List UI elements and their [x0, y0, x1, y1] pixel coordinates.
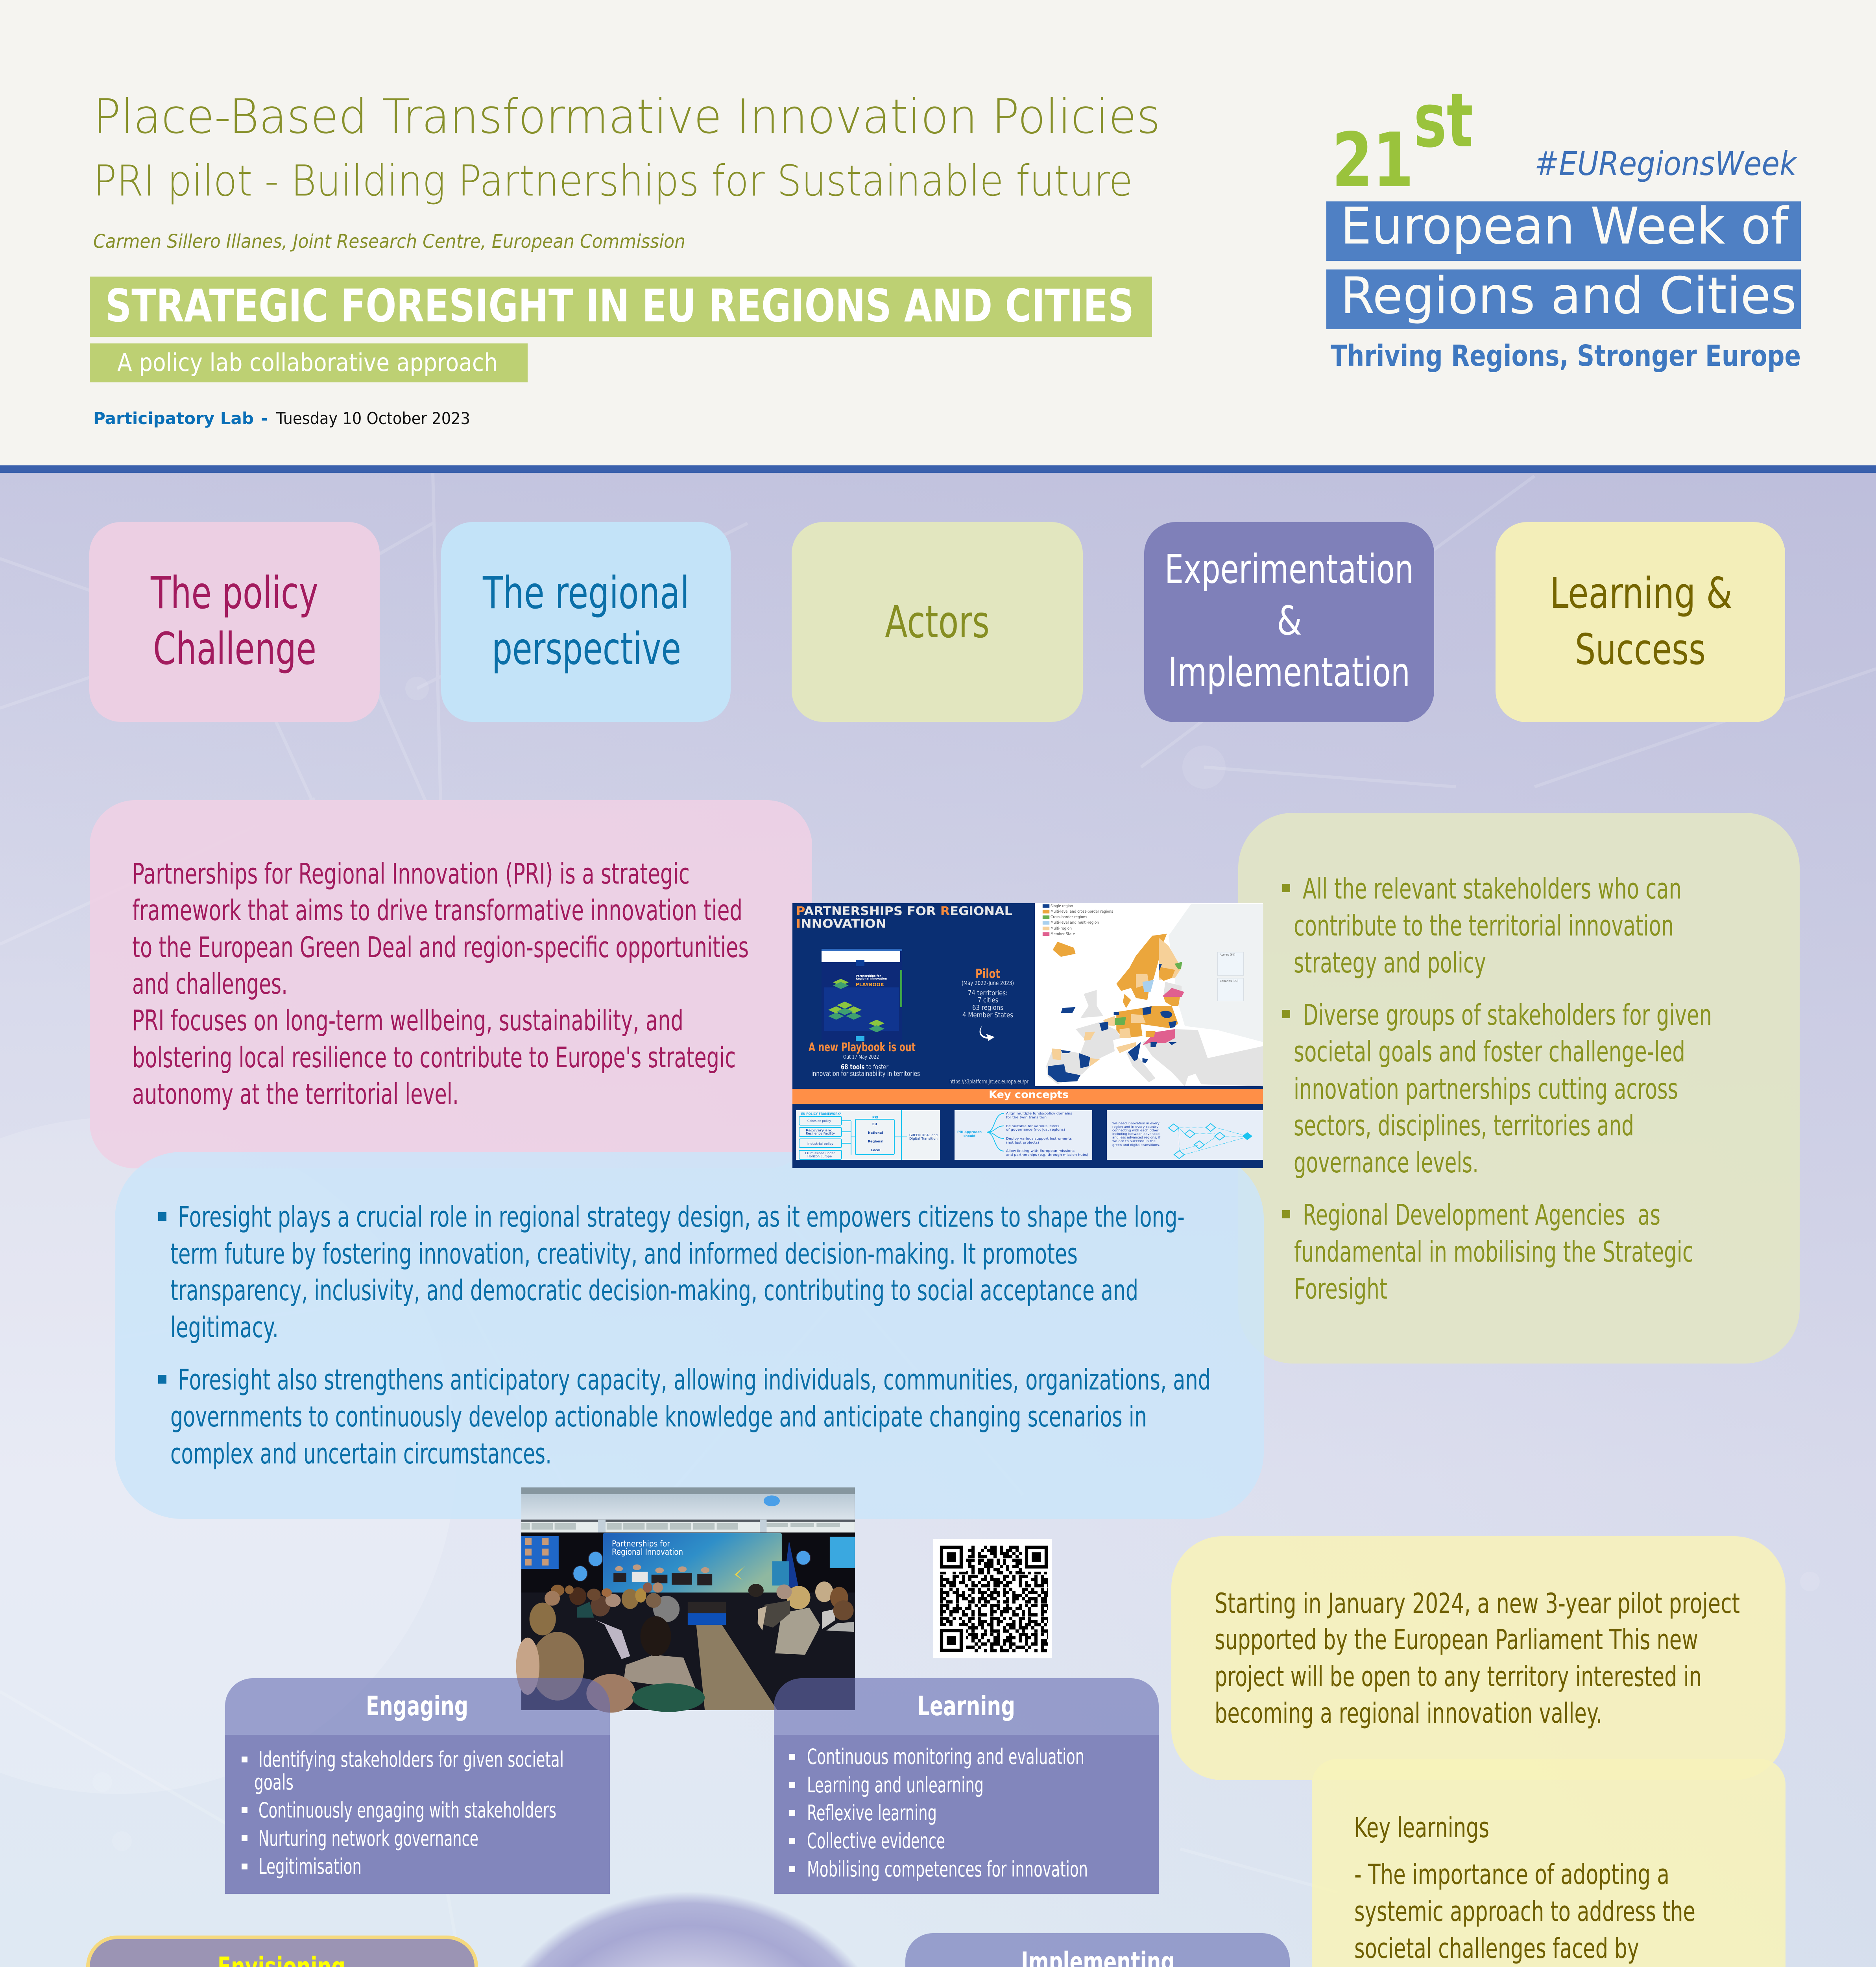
key concept: EU policy framework: EU POLICY FRAMEWORK* [801, 1112, 842, 1116]
logo: European Week of Regions and Cities: #EURegionsWeek [1534, 144, 1798, 183]
card: Learning and Success: Success [1575, 625, 1706, 674]
session subtitle: A policy lab collaborative approach [117, 348, 498, 377]
panel: key learnings: - The importance of adopting a [1354, 1858, 1669, 1891]
card: The regional perspective: The regional [482, 568, 689, 619]
map of Europe: Single region [1051, 904, 1073, 908]
key concept: EU policy framework: Local [871, 1148, 881, 1152]
process card: Learning: Learning and unlearning [807, 1773, 984, 1797]
panel: policy challenge: autonomy at the territorial level. [132, 1078, 459, 1111]
panel: regional perspective: governments to continuously develop actionable knowledge and anticipate changing scenarios in [170, 1400, 1147, 1433]
process card: Engaging: Nurturing network governance [259, 1826, 478, 1851]
map of Europe: Cross-border regions [1051, 915, 1087, 919]
panel: actors [1238, 813, 1800, 1364]
card: The policy Challenge [89, 522, 380, 722]
panel: policy challenge: and challenges. [132, 967, 288, 1000]
panel: key learnings: societal challenges faced by [1354, 1932, 1639, 1965]
process card: Engaging: Legitimisation [259, 1854, 362, 1879]
process card: Learning: Continuous monitoring and evaluation [807, 1744, 1084, 1769]
panel: actors: Regional Development Agencies as [1303, 1198, 1660, 1231]
key concept: PRI approach: Allow linking with European missions [1006, 1149, 1075, 1153]
process card: Learning: Collective evidence [807, 1829, 945, 1853]
panel: regional perspective: complex and uncertain circumstances. [170, 1437, 552, 1470]
session subtitle [90, 343, 528, 382]
slide title: PARTNERSHIPS FOR REGIONAL [796, 904, 1012, 918]
card: The policy Challenge: Challenge [153, 624, 316, 675]
panel: new pilot project: project will be open to any territory interested in [1215, 1661, 1702, 1693]
session date [93, 409, 470, 428]
process card: Envisioning (highlighted) [87, 1939, 477, 1967]
panel: new pilot project: supported by the European Parliament This new [1215, 1624, 1698, 1656]
panel: actors: sectors, disciplines, territories and [1294, 1109, 1634, 1142]
session date: Tuesday 10 October 2023 [276, 409, 470, 428]
playbook caption: Out 17 May 2022 [843, 1054, 879, 1060]
panel: regional perspective: term future by fostering innovation, creativity, and informed decision-making. It promotes [170, 1237, 1078, 1270]
panel: actors: All the relevant stakeholders who can [1303, 872, 1682, 905]
playbook caption [809, 1041, 920, 1078]
author line: Carmen Sillero Illanes, Joint Research Centre, European Commission [93, 231, 685, 253]
key concept: EU policy framework [796, 1110, 940, 1160]
card: Experimentation and Implementation: & [1277, 598, 1302, 644]
logo: European Week of Regions and Cities: 21 [1332, 117, 1414, 204]
process card: Learning: Learning [917, 1691, 1015, 1722]
card: The policy Challenge: The policy [150, 568, 318, 619]
key concept: PRI approach: Be suitable for various levels [1006, 1124, 1059, 1128]
panel: actors: societal goals and foster challenge-led [1294, 1035, 1685, 1068]
card: The regional perspective: perspective [492, 624, 681, 675]
process card: Learning [774, 1678, 1159, 1894]
panel: key learnings: Key learnings [1354, 1812, 1489, 1844]
session banner: STRATEGIC FORESIGHT IN EU REGIONS AND CITIES [105, 280, 1134, 332]
map of Europe: Member State [1051, 932, 1075, 936]
playbook caption: A new Playbook is out [809, 1041, 916, 1054]
panel: regional perspective [115, 1152, 1264, 1519]
card: Learning and Success: Learning & [1550, 569, 1732, 618]
panel: policy challenge: Partnerships for Regional Innovation (PRI) is a strategic [132, 857, 690, 890]
card: Experimentation and Implementation: Implementation [1168, 649, 1410, 696]
figure: Partnerships for Regional Innovation slide [792, 903, 1263, 1168]
panel: new pilot project: becoming a regional innovation valley. [1215, 1697, 1602, 1729]
header band [0, 0, 1876, 473]
key concepts band [792, 1089, 1263, 1104]
playbook cover: Partnerships for [856, 974, 881, 978]
pilot facts: 63 regions [972, 1004, 1003, 1012]
key concept: PRI approach: and partnerships (e.g. through mission hubs) [1006, 1153, 1088, 1157]
session date: - [261, 409, 268, 428]
key concept: EU policy framework: Recovery and [806, 1129, 833, 1132]
playbook caption: innovation for sustainability in territories [811, 1070, 920, 1078]
panel: policy challenge: PRI focuses on long-term wellbeing, sustainability, and [132, 1004, 683, 1037]
panel: policy challenge: bolstering local resilience to contribute to Europe's strategic [132, 1041, 736, 1074]
key concept: EU policy framework: EU missions under [805, 1151, 835, 1155]
map of Europe: Multi-level and cross-border regions [1051, 910, 1113, 914]
key concept: EU policy framework: EU [872, 1122, 877, 1126]
key concept: EU policy framework: Regional [868, 1140, 884, 1143]
panel: actors: Diverse groups of stakeholders for given [1303, 998, 1712, 1031]
panel: policy challenge [90, 800, 812, 1168]
session date: Participatory Lab [93, 409, 254, 428]
key concept: PRI approach: of governance (not just regions) [1006, 1128, 1065, 1131]
pilot facts: (May 2022-June 2023) [962, 980, 1014, 987]
key concept: PRI approach: (not just projects) [1006, 1141, 1039, 1144]
key concept: innovation in every region: and less advanced regions, if [1112, 1136, 1160, 1139]
key concept: innovation in every region [1107, 1110, 1263, 1160]
key concept: innovation in every region: including between advanced [1112, 1132, 1160, 1136]
process card: Engaging: Continuously engaging with stakeholders [259, 1798, 556, 1823]
key concept: PRI approach: should [964, 1134, 975, 1138]
panel: actors: strategy and policy [1294, 946, 1486, 979]
logo: European Week of Regions and Cities [1326, 77, 1801, 373]
title: Place-Based Transformative Innovation Policies [93, 90, 1160, 144]
key concept: PRI approach [955, 1110, 1092, 1160]
card: Experimentation and Implementation [1144, 522, 1434, 722]
process card: Engaging: Engaging [366, 1691, 468, 1722]
QR code [933, 1539, 1052, 1658]
panel: regional perspective: Foresight plays a crucial role in regional strategy design, as it empowers citizens to shape the long- [178, 1200, 1185, 1233]
key concept: innovation in every region: connecting with each other, [1112, 1129, 1160, 1132]
panel: key learnings: systemic approach to address the [1354, 1895, 1695, 1928]
panel: actors: innovation partnerships cutting across [1294, 1072, 1678, 1105]
key concept: EU policy framework: Industrial policy [807, 1142, 833, 1146]
panel: regional perspective: legitimacy. [170, 1311, 279, 1344]
process card: Implementing [905, 1933, 1290, 1967]
playbook cover [822, 949, 902, 1041]
photo: session audience [516, 1487, 855, 1713]
panel: actors: contribute to the territorial innovation [1294, 909, 1674, 942]
panel: regional perspective: transparency, inclusivity, and democratic decision-making, contributing to social acceptance and [170, 1274, 1138, 1307]
map of Europe: Multi-level and multi-region [1051, 921, 1099, 925]
card: Learning and Success [1496, 522, 1785, 722]
slide url: https://s3platform.jrc.ec.europa.eu/pri [949, 1079, 1030, 1085]
key concept: innovation in every region: We need innovation in every [1112, 1122, 1160, 1125]
process card: Engaging: goals [254, 1770, 294, 1795]
playbook caption: 68 tools to foster [841, 1063, 888, 1071]
pilot facts: Pilot [975, 966, 1000, 981]
pilot facts: 74 territories: [968, 989, 1008, 997]
key concept: PRI approach: for the twin transition [1006, 1116, 1047, 1119]
map of Europe: Multi-region [1051, 926, 1072, 931]
photo: session audience: Partnerships for [612, 1539, 670, 1548]
card: Experimentation and Implementation: Experimentation [1165, 546, 1414, 593]
title: PRI pilot - Building Partnerships for Sustainable future [93, 157, 1133, 206]
key concept: EU policy framework: PRI [872, 1116, 878, 1119]
key concept: EU policy framework: Resilience Facility [806, 1132, 835, 1135]
key concept: innovation in every region: we are to succeed in the [1112, 1139, 1156, 1143]
key concept: PRI approach: Align multiple funds/policy domains [1006, 1112, 1072, 1115]
arrow: pilot to map [980, 1026, 995, 1041]
logo: European Week of Regions and Cities: European Week of [1341, 197, 1789, 256]
photo: session audience: Regional Innovation [612, 1547, 683, 1557]
panel: policy challenge: to the European Green Deal and region-specific opportunities [132, 931, 749, 964]
key concept: EU policy framework: Horizon Europe [807, 1155, 832, 1158]
process card: Engaging [225, 1678, 610, 1894]
playbook cover: Regional Innovation [856, 977, 887, 980]
logo: European Week of Regions and Cities: st [1414, 77, 1473, 164]
key concept: EU policy framework: GREEN DEAL and [909, 1133, 938, 1137]
process card: Learning: Reflexive learning [807, 1801, 937, 1825]
central orb: processes and activities [484, 1891, 894, 1967]
map of Europe [1035, 903, 1263, 1086]
slide title [796, 904, 1012, 931]
map of Europe: Açores (PT) [1220, 953, 1235, 956]
key concept: PRI approach: PRI approach [957, 1130, 982, 1134]
panel: new pilot project [1171, 1536, 1786, 1780]
key concept: innovation in every region: green and digital transitions. [1112, 1143, 1160, 1147]
panel: regional perspective: Foresight also strengthens anticipatory capacity, allowing individuals, communities, organizations, and [178, 1363, 1211, 1396]
process card: Engaging: Identifying stakeholders for given societal [259, 1747, 564, 1772]
logo: European Week of Regions and Cities: Regions and Cities [1341, 267, 1797, 325]
card: Actors [792, 522, 1083, 722]
pilot facts: 7 cities [978, 996, 998, 1004]
page background [0, 472, 1876, 1967]
process card: Learning: Mobilising competences for innovation [807, 1857, 1088, 1882]
key concept: EU policy framework: National [868, 1131, 883, 1135]
panel: actors: Foresight [1294, 1272, 1387, 1305]
panel: policy challenge: framework that aims to drive transformative innovation tied [132, 894, 742, 927]
key concept: EU policy framework: Digital Transition [909, 1137, 938, 1140]
slide title: INNOVATION [796, 917, 886, 931]
map of Europe: Canarias (ES) [1220, 980, 1238, 983]
panel: actors: fundamental in mobilising the Strategic [1294, 1235, 1693, 1268]
playbook cover: PLAYBOOK [856, 982, 884, 987]
key concepts band: Key concepts [989, 1089, 1069, 1101]
card: The regional perspective [441, 522, 731, 722]
pilot facts [962, 966, 1014, 1019]
key concept: EU policy framework: Cohesion policy [807, 1119, 831, 1123]
pilot facts: 4 Member States [962, 1011, 1013, 1019]
card: Actors: Actors [885, 597, 990, 648]
panel: key learnings [1312, 1759, 1786, 1967]
panel: actors: governance levels. [1294, 1146, 1479, 1179]
key concept: innovation in every region: region and in every country, [1112, 1125, 1160, 1129]
key concept: PRI approach: Deploy various support instruments [1006, 1137, 1072, 1140]
title [93, 90, 1160, 206]
